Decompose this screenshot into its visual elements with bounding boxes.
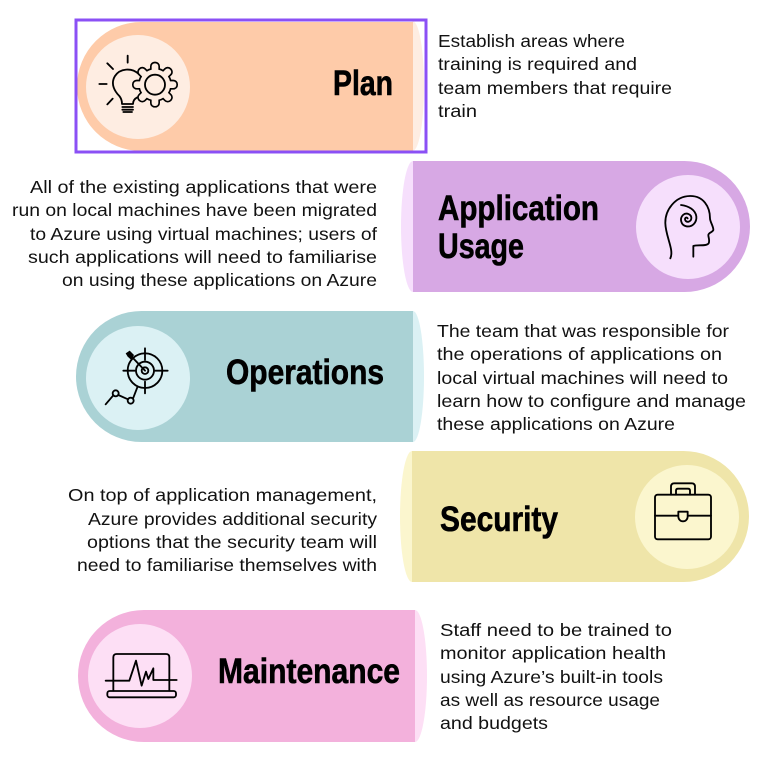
text: maintenance description: [440, 620, 672, 733]
text: application usage description: to Azure using virtual machines; users of: [30, 224, 377, 244]
heading: Security: Security: [440, 500, 558, 539]
heading: Maintenance: Maintenance: [218, 652, 400, 691]
text: maintenance description: Staff need to be trained to: [440, 620, 672, 640]
heading: Application Usage: Application: [438, 189, 599, 228]
heading: Application Usage: [438, 189, 599, 266]
panel: security: [68, 451, 749, 582]
pill: application usage: [401, 161, 750, 292]
text: application usage description: run on local machines have been migrated: [12, 200, 377, 220]
panel: maintenance: [78, 610, 672, 742]
text: operations description: learn how to configure and manage: [437, 391, 746, 411]
selection frame: [76, 20, 426, 152]
text: application usage description: [12, 177, 377, 290]
text: plan description: Establish areas where: [438, 31, 625, 51]
text: application usage description: on using these applications on Azure: [62, 270, 377, 290]
text: operations description: [437, 321, 746, 434]
panel: plan: [76, 20, 672, 152]
panel: application usage: [12, 161, 750, 292]
panel: operations: [76, 311, 746, 442]
text: maintenance description: and budgets: [440, 713, 548, 733]
text: plan description: train: [438, 101, 477, 121]
text: security description: need to familiarise themselves with: [77, 555, 377, 575]
text: security description: On top of application management,: [68, 485, 377, 505]
text: plan description: [438, 31, 672, 121]
text: operations description: local virtual machines will need to: [437, 368, 728, 388]
text: maintenance description: monitor application health: [440, 643, 666, 663]
text: security description: Azure provides additional security: [88, 509, 377, 529]
pill: security: [400, 451, 749, 582]
text: security description: options that the security team will: [87, 532, 377, 552]
text: operations description: these applications on Azure: [437, 414, 675, 434]
heading: Plan: Plan: [333, 64, 393, 103]
text: security description: [68, 485, 377, 575]
heading: Application Usage: Usage: [438, 227, 524, 266]
text: maintenance description: as well as resource usage: [440, 690, 660, 710]
icon: head with spiral: [636, 175, 740, 279]
icon: briefcase: [635, 465, 739, 569]
text: application usage description: such applications will need to familiarise: [28, 247, 377, 267]
text: maintenance description: using Azure’s built-in tools: [440, 667, 663, 687]
heading: Operations: Operations: [226, 353, 384, 392]
text: plan description: training is required and: [438, 54, 637, 74]
icon: laptop with pulse: [88, 624, 192, 728]
text: application usage description: All of the existing applications that were: [30, 177, 377, 197]
pill: plan: [77, 22, 424, 151]
text: plan description: team members that require: [438, 78, 672, 98]
pill: operations: [76, 311, 424, 442]
pill: maintenance: [78, 610, 427, 742]
icon: light bulb and gear: [86, 35, 190, 139]
text: operations description: the operations of applications on: [437, 344, 722, 364]
icon: target and chart: [86, 326, 190, 430]
text: operations description: The team that was responsible for: [437, 321, 729, 341]
